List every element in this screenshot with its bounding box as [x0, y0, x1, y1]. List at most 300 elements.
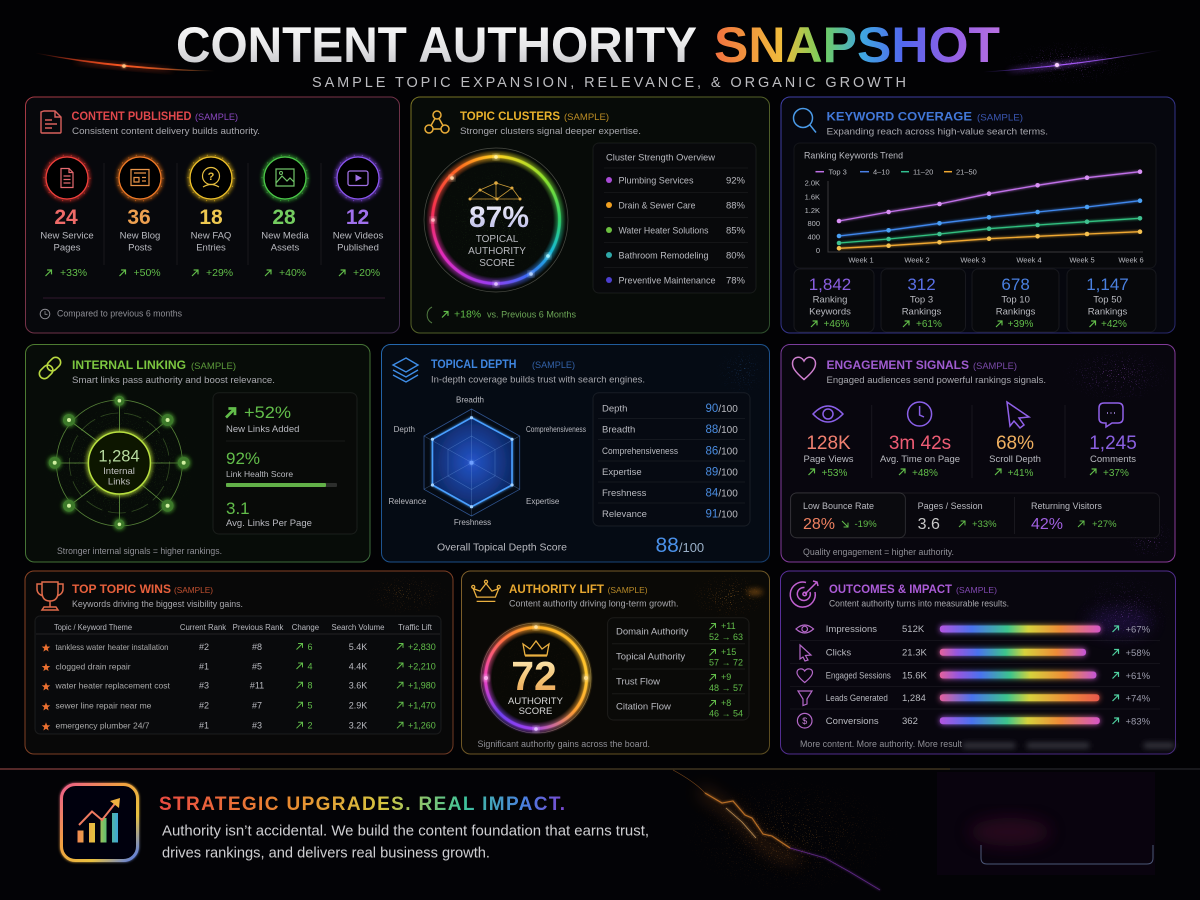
table header: Search Volume — [332, 623, 384, 632]
metric: new service pages: 24 — [54, 206, 78, 229]
list: depth scores: Comprehensiveness — [602, 446, 678, 457]
metric: new media assets — [261, 155, 309, 279]
table row 4: sewer line repair near me — [56, 701, 152, 711]
line chart: ranking keywords trend: Week 3 — [960, 256, 986, 264]
list: depth scores: Expertise — [602, 467, 642, 478]
list: depth scores: Relevance — [602, 509, 647, 520]
radar chart: depth dimensions: Depth — [394, 425, 415, 434]
stat: top 10 rankings: Top 10 — [1001, 295, 1030, 306]
metric: comments: Comments — [1090, 454, 1136, 465]
note: engagement takeaway: Quality engagement = higher authority. — [803, 547, 954, 557]
heading: INTERNAL LINKING — [72, 360, 186, 372]
decorative streak: red comet — [35, 53, 215, 72]
panel: authority lift — [462, 571, 770, 754]
list: cluster strength overview: 78% — [726, 276, 746, 286]
heading: Engaged audiences send powerful rankings signals. — [826, 375, 1046, 386]
metric: new service pages: Pages — [54, 243, 81, 254]
table row 2: #1 — [199, 661, 209, 671]
panel: outcomes and impact — [780, 571, 1176, 754]
subtitle: SAMPLE TOPIC EXPANSION, RELEVANCE, & ORGANIC GROWTH — [312, 75, 906, 91]
stat: top 50 rankings: +42% — [1101, 319, 1127, 330]
stats: link metrics: New Links Added — [226, 424, 299, 435]
stat: ranking keywords: 1,842 — [809, 275, 851, 294]
list: authority metrics: Trust Flow — [616, 677, 660, 688]
stat: top 3 rankings — [881, 269, 966, 332]
heading — [509, 584, 678, 609]
icon: magnifier — [794, 108, 816, 132]
metric: new faq entries: 18 — [199, 206, 223, 229]
icon: document — [41, 111, 61, 133]
heading: OUTCOMES & IMPACT — [829, 584, 952, 596]
line chart: ranking keywords trend: Ranking Keywords Trend — [804, 151, 903, 162]
list: cluster strength overview: Cluster Strength Overview — [606, 152, 715, 164]
row: engaged sessions — [797, 669, 1151, 682]
table row 5 — [42, 721, 436, 731]
stat: top 10 rankings: Rankings — [996, 306, 1036, 317]
table header: Previous Rank — [233, 623, 283, 632]
note: comparison period: Compared to previous 6 months — [57, 308, 182, 318]
list: cluster strength overview — [593, 143, 756, 293]
table row 5: +1,260 — [408, 721, 436, 731]
table row 1: 5.4K — [349, 642, 367, 652]
row: clicks: Clicks — [826, 648, 851, 658]
chart: internal links network: 1,284 — [98, 448, 140, 466]
metric: new blog posts: +50% — [134, 267, 161, 279]
heading: CONTENT PUBLISHED — [72, 111, 192, 123]
row: impressions: Impressions — [826, 624, 877, 635]
note: internal linking takeaway: Stronger internal signals = higher rankings. — [57, 546, 222, 556]
metric: new faq entries: ? — [208, 171, 215, 183]
table header: Topic / Keyword Theme — [54, 623, 132, 632]
table row 5: emergency plumber 24/7 — [56, 721, 150, 731]
chart: internal links network: Internal — [103, 466, 135, 477]
icon: network — [468, 181, 522, 200]
metric: comments: +37% — [1103, 468, 1129, 479]
list: cluster strength overview: Preventive Maintenance — [618, 276, 716, 286]
metric: average time on page — [880, 402, 960, 479]
table header: Change — [292, 623, 319, 632]
overall depth score: Overall Topical Depth Score — [437, 542, 567, 554]
table row 4: 2.9K — [349, 701, 367, 711]
stat: top 10 rankings — [972, 269, 1059, 332]
line chart: ranking keywords trend: Week 6 — [1118, 256, 1144, 264]
stats: link metrics: 92% — [226, 449, 260, 468]
heading: ENGAGEMENT SIGNALS — [826, 360, 969, 372]
heading: (SAMPLE) — [956, 585, 997, 595]
row: conversions — [797, 713, 1151, 728]
table row 3: 3.6K — [349, 681, 367, 691]
row: conversions: +83% — [1126, 716, 1151, 728]
metric: scroll depth: 68% — [996, 433, 1034, 454]
stat: top 3 rankings: Top 3 — [910, 295, 933, 306]
metric: new videos published: 12 — [346, 206, 369, 229]
panel: engagement signals — [781, 344, 1175, 562]
heading — [72, 584, 243, 610]
table row 3: water heater replacement cost — [54, 681, 170, 691]
line chart: ranking keywords trend: Week 4 — [1016, 256, 1042, 264]
table row 3: +1,980 — [408, 681, 436, 691]
list: depth scores: 89/100 — [706, 466, 738, 478]
row: clicks: 21.3K — [902, 648, 927, 658]
metric: new faq entries — [188, 155, 234, 279]
stat: ranking keywords: Ranking — [813, 295, 847, 306]
chart: topical authority score ring: AUTHORITY — [468, 246, 526, 257]
table row 3: 8 — [307, 681, 313, 691]
panel: internal linking — [26, 344, 370, 562]
icon: trophy — [37, 582, 63, 610]
stats: retention strip: 42% — [1031, 516, 1063, 533]
line chart: ranking keywords trend: Week 1 — [848, 256, 874, 264]
metric: new faq entries: New FAQ — [191, 230, 231, 242]
heading: Consistent content delivery builds authority. — [72, 126, 260, 137]
chart: authority score ring: 72 — [511, 653, 557, 699]
panel: top topic wins — [25, 571, 453, 754]
metric: new blog posts: New Blog — [120, 230, 160, 242]
metric: new videos published: New Videos — [333, 230, 384, 242]
list: depth scores: 90/100 — [706, 403, 738, 415]
table row 2: 4 — [307, 661, 313, 671]
radar chart: depth dimensions: Expertise — [526, 497, 560, 506]
list: authority metrics: 52 → 63 — [709, 632, 743, 642]
heading: (SAMPLE) — [191, 361, 236, 372]
row: conversions: Conversions — [826, 716, 879, 727]
stat: ranking keywords: +46% — [824, 319, 849, 330]
heading: Keywords driving the biggest visibility gains. — [72, 599, 243, 610]
heading: (SAMPLE) — [977, 112, 1023, 124]
callout text: drives rankings, and delivers real business growth. — [162, 846, 490, 862]
radar chart: depth dimensions — [388, 396, 586, 527]
icon: growth chart — [62, 784, 138, 860]
table row 4: #7 — [252, 701, 262, 711]
metric: new blog posts: 36 — [127, 206, 151, 229]
radar chart: depth dimensions: Comprehensiveness — [526, 425, 586, 434]
stats: retention strip: Returning Visitors — [1031, 501, 1102, 511]
table row 1: 6 — [307, 642, 313, 652]
callout text — [162, 824, 649, 862]
title — [176, 17, 1000, 73]
title: SNAPSHOT — [714, 17, 1000, 73]
list: authority metrics: Domain Authority — [616, 627, 689, 638]
row: leads generated — [798, 691, 1151, 706]
stats: retention strip: Pages / Session — [918, 501, 983, 511]
metric: page views — [804, 406, 854, 479]
table row 4: #2 — [199, 701, 209, 711]
list: authority metrics: +11 — [721, 621, 736, 631]
heading: AUTHORITY LIFT — [509, 584, 604, 596]
icon: heart — [792, 357, 816, 380]
chart: authority score ring: SCORE — [519, 706, 552, 717]
overall depth score — [437, 534, 704, 557]
icon: chain link — [37, 355, 63, 381]
trend: versus previous period — [427, 307, 576, 323]
row: impressions: +67% — [1126, 624, 1151, 636]
list: cluster strength overview: 85% — [726, 226, 746, 236]
row: leads generated: +74% — [1126, 694, 1151, 704]
metric: new blog posts — [117, 155, 163, 279]
legend — [816, 168, 977, 176]
stat: ranking keywords — [794, 269, 874, 332]
radar chart: depth dimensions: Relevance — [388, 497, 427, 506]
metric: comments: 1,245 — [1089, 433, 1137, 454]
note: authority takeaway: Significant authority gains across the board. — [478, 739, 650, 749]
row: impressions: 512K — [902, 624, 925, 635]
trend: versus previous period: vs. Previous 6 Months — [487, 310, 576, 320]
radar chart: depth dimensions: Freshness — [454, 518, 491, 527]
metric: page views: +53% — [822, 468, 847, 479]
heading: (SAMPLE) — [195, 112, 238, 123]
icon: target — [790, 581, 818, 607]
stats: retention strip: 28% — [803, 516, 835, 533]
table row 4: 5 — [307, 701, 313, 711]
decorative ghost panel — [937, 772, 1155, 875]
heading: (SAMPLE) — [608, 585, 648, 595]
table row 5: #1 — [199, 721, 209, 731]
note: outcomes takeaway — [800, 739, 1174, 749]
decorative nebula streak — [673, 770, 900, 895]
table row 3 — [42, 681, 436, 691]
stats: retention strip: -19% — [854, 519, 877, 530]
list: authority metrics: 46 → 54 — [709, 709, 743, 719]
chart: internal links network: Links — [108, 476, 130, 488]
heading: (SAMPLE) — [564, 112, 609, 123]
row: leads generated: Leads Generated — [826, 693, 888, 704]
row: engaged sessions: 15.6K — [902, 670, 927, 682]
panel: content published — [26, 97, 400, 333]
table row 2: +2,210 — [408, 661, 436, 671]
list: authority metrics — [608, 618, 749, 720]
stat: top 3 rankings: +61% — [916, 319, 942, 330]
table header: Current Rank — [180, 623, 226, 632]
heading: Expanding reach across high-value search terms. — [826, 126, 1048, 138]
row: conversions: 362 — [902, 716, 918, 727]
stats: link metrics: 3.1 — [226, 499, 250, 518]
stats: retention strip: Low Bounce Rate — [803, 501, 874, 511]
row: engaged sessions: Engaged Sessions — [826, 670, 891, 682]
heading — [826, 360, 1046, 386]
heading — [72, 111, 260, 137]
row: clicks: +58% — [1126, 648, 1151, 659]
line chart: ranking keywords trend: Week 5 — [1069, 256, 1095, 264]
overall depth score: 88/100 — [656, 534, 704, 557]
table row 5: 2 — [307, 721, 313, 731]
stat: top 50 rankings: Top 50 — [1093, 295, 1122, 306]
heading: (SAMPLE) — [973, 361, 1017, 372]
legend: 4–10 — [873, 168, 890, 176]
list: authority metrics: +9 — [721, 672, 731, 682]
chart: internal links network — [40, 392, 200, 534]
table row 4: +1,470 — [408, 701, 436, 711]
row: impressions — [796, 624, 1151, 636]
list: depth scores: 84/100 — [706, 488, 738, 500]
heading: KEYWORD COVERAGE — [826, 112, 972, 124]
list: authority metrics: Topical Authority — [616, 652, 685, 663]
stat: top 50 rankings: 1,147 — [1086, 275, 1129, 294]
decorative streak: purple comet — [983, 40, 1162, 85]
list: cluster strength overview: 88% — [726, 200, 746, 212]
callout text: Authority isn’t accidental. We build the content foundation that earns trust, — [162, 824, 649, 840]
list: cluster strength overview: Drain & Sewer Care — [618, 200, 696, 212]
heading: TOPICAL DEPTH — [431, 359, 516, 371]
table row 4 — [42, 701, 436, 711]
heading: Content authority driving long-term growth. — [509, 599, 678, 609]
metric: new videos published: +20% — [353, 267, 380, 279]
list: cluster strength overview: 92% — [726, 176, 746, 186]
table row 1: #8 — [252, 642, 262, 652]
heading — [829, 584, 1009, 609]
heading — [72, 360, 275, 386]
metric: new media assets: Assets — [271, 243, 300, 254]
heading: Content authority turns into measurable results. — [829, 599, 1009, 609]
stats: retention strip: 3.6 — [918, 516, 940, 533]
row: conversions: $ — [802, 716, 807, 726]
metric: new service pages: +33% — [60, 267, 87, 279]
list: cluster strength overview: Water Heater Solutions — [618, 226, 709, 236]
trend: versus previous period: +18% — [454, 308, 481, 320]
table row 2: #5 — [252, 661, 262, 671]
list: depth scores: 91/100 — [706, 508, 738, 520]
heading: TOPIC CLUSTERS — [460, 111, 560, 123]
stats: link metrics: Avg. Links Per Page — [226, 518, 312, 529]
metric: comments — [1089, 403, 1137, 479]
icon: crown — [472, 580, 500, 601]
line chart: ranking keywords trend: 400 — [807, 232, 820, 242]
list: cluster strength overview: 80% — [726, 250, 746, 262]
heading: In-depth coverage builds trust with search engines. — [431, 375, 645, 386]
stats: link metrics: Link Health Score — [226, 469, 293, 479]
table: top topics — [35, 616, 441, 734]
metric: new media assets: New Media — [261, 230, 309, 242]
line chart: ranking keywords trend: 0 — [816, 246, 820, 255]
stats: retention strip — [791, 493, 1160, 538]
table row 2: clogged drain repair — [56, 661, 131, 671]
line chart: ranking keywords trend: 1.6K — [805, 192, 820, 202]
stat: top 50 rankings: Rankings — [1088, 306, 1128, 317]
list: depth scores: Freshness — [602, 488, 647, 499]
row: engaged sessions: +61% — [1126, 671, 1151, 682]
table row 5: 3.2K — [349, 721, 367, 731]
metric: average time on page: Avg. Time on Page — [880, 454, 960, 465]
stats: link metrics — [213, 393, 357, 534]
heading — [431, 359, 645, 386]
metric: new service pages — [40, 155, 94, 279]
panel: topical depth — [382, 344, 770, 562]
table row 1: +2,830 — [408, 642, 436, 652]
chart: authority score ring — [480, 622, 592, 734]
list: depth scores: 88/100 — [706, 424, 738, 436]
chart: authority score ring: AUTHORITY — [508, 696, 564, 707]
metric: scroll depth: +41% — [1008, 468, 1034, 479]
list: authority metrics: 48 → 57 — [709, 683, 743, 693]
stat: top 50 rankings — [1067, 269, 1156, 332]
note: outcomes takeaway: More content. More authority. More result — [800, 739, 962, 749]
line chart: ranking keywords trend: 1.2K — [805, 206, 820, 215]
list: depth scores: Breadth — [602, 424, 635, 436]
line chart: ranking keywords trend: Week 2 — [904, 256, 930, 264]
table row 3: #3 — [199, 681, 209, 691]
heading: (SAMPLE) — [174, 585, 213, 595]
metric: new media assets: +40% — [279, 267, 306, 279]
heading: Stronger clusters signal deeper expertise. — [460, 126, 641, 137]
icon: layers — [393, 358, 418, 382]
stat: top 10 rankings: +39% — [1008, 319, 1034, 330]
legend: 11–20 — [913, 168, 933, 176]
legend: 21–50 — [956, 168, 977, 176]
metric: new blog posts: Posts — [128, 243, 152, 254]
metric: average time on page: +48% — [912, 468, 938, 479]
table row 2 — [42, 661, 436, 671]
metric: new faq entries: Entries — [196, 243, 226, 254]
table row 1 — [42, 642, 436, 652]
line chart: ranking keywords trend: 800 — [807, 219, 820, 228]
heading — [460, 111, 641, 137]
icon: small crown — [523, 641, 549, 656]
metric: average time on page: 3m 42s — [889, 433, 951, 454]
footer band — [0, 769, 1200, 900]
panel: topic clusters — [411, 97, 770, 333]
row: leads generated: 1,284 — [902, 693, 926, 704]
metric: new faq entries: +29% — [206, 267, 233, 279]
metric: scroll depth: Scroll Depth — [989, 454, 1041, 465]
stats: retention strip: +27% — [1092, 519, 1117, 530]
metric: new videos published — [333, 155, 384, 279]
icon: cluster nodes — [425, 111, 449, 133]
list: depth scores: 86/100 — [706, 446, 738, 458]
metric: scroll depth — [989, 402, 1041, 479]
metric: page views: Page Views — [804, 454, 854, 465]
metric: new videos published: Published — [337, 243, 379, 254]
stat: top 10 rankings: 678 — [1001, 275, 1030, 294]
metric: new media assets: 28 — [272, 206, 296, 229]
table row 1: tankless water heater installation — [56, 642, 169, 652]
list: authority metrics: 57 → 72 — [709, 658, 743, 668]
title: CONTENT AUTHORITY — [176, 17, 697, 73]
stats: link metrics: +52% — [244, 403, 291, 422]
metric: new service pages: New Service — [40, 230, 94, 242]
chart: topical authority score ring — [424, 148, 568, 292]
list: depth scores: Depth — [602, 404, 627, 414]
stat: ranking keywords: Keywords — [809, 306, 851, 317]
legend: Top 3 — [828, 168, 847, 176]
radar chart: depth dimensions: Breadth — [456, 396, 484, 405]
heading: TOP TOPIC WINS — [72, 584, 171, 596]
callout heading: STRATEGIC UPGRADES. REAL IMPACT. — [159, 794, 565, 815]
table row 1: #2 — [199, 642, 209, 652]
list: authority metrics: +15 — [721, 647, 736, 657]
list: cluster strength overview: Plumbing Services — [618, 176, 694, 186]
list: cluster strength overview: Bathroom Remodeling — [618, 250, 708, 262]
line chart: ranking keywords trend: 2.0K — [805, 178, 820, 188]
stat: top 3 rankings: Rankings — [902, 306, 942, 317]
table row 3: #11 — [250, 681, 264, 691]
row: clicks — [800, 645, 1151, 661]
stats: retention strip: +33% — [972, 519, 997, 530]
panel: keyword coverage — [781, 97, 1175, 333]
table row 5: #3 — [252, 721, 262, 731]
metric: page views: 128K — [806, 433, 851, 454]
table header — [54, 623, 433, 632]
table header: Traffic Lift — [398, 623, 433, 632]
chart: topical authority score ring: SCORE — [479, 258, 515, 269]
chart: topical authority score ring: 87% — [469, 201, 529, 234]
list: authority metrics: +8 — [721, 698, 731, 708]
line chart: ranking keywords trend — [794, 143, 1156, 268]
stat: top 3 rankings: 312 — [907, 275, 936, 294]
list: authority metrics: Citation Flow — [616, 702, 671, 713]
table row 2: 4.4K — [349, 661, 367, 671]
heading: (SAMPLE) — [532, 360, 575, 371]
list: depth scores — [593, 393, 750, 526]
heading: Smart links pass authority and boost relevance. — [72, 375, 275, 386]
